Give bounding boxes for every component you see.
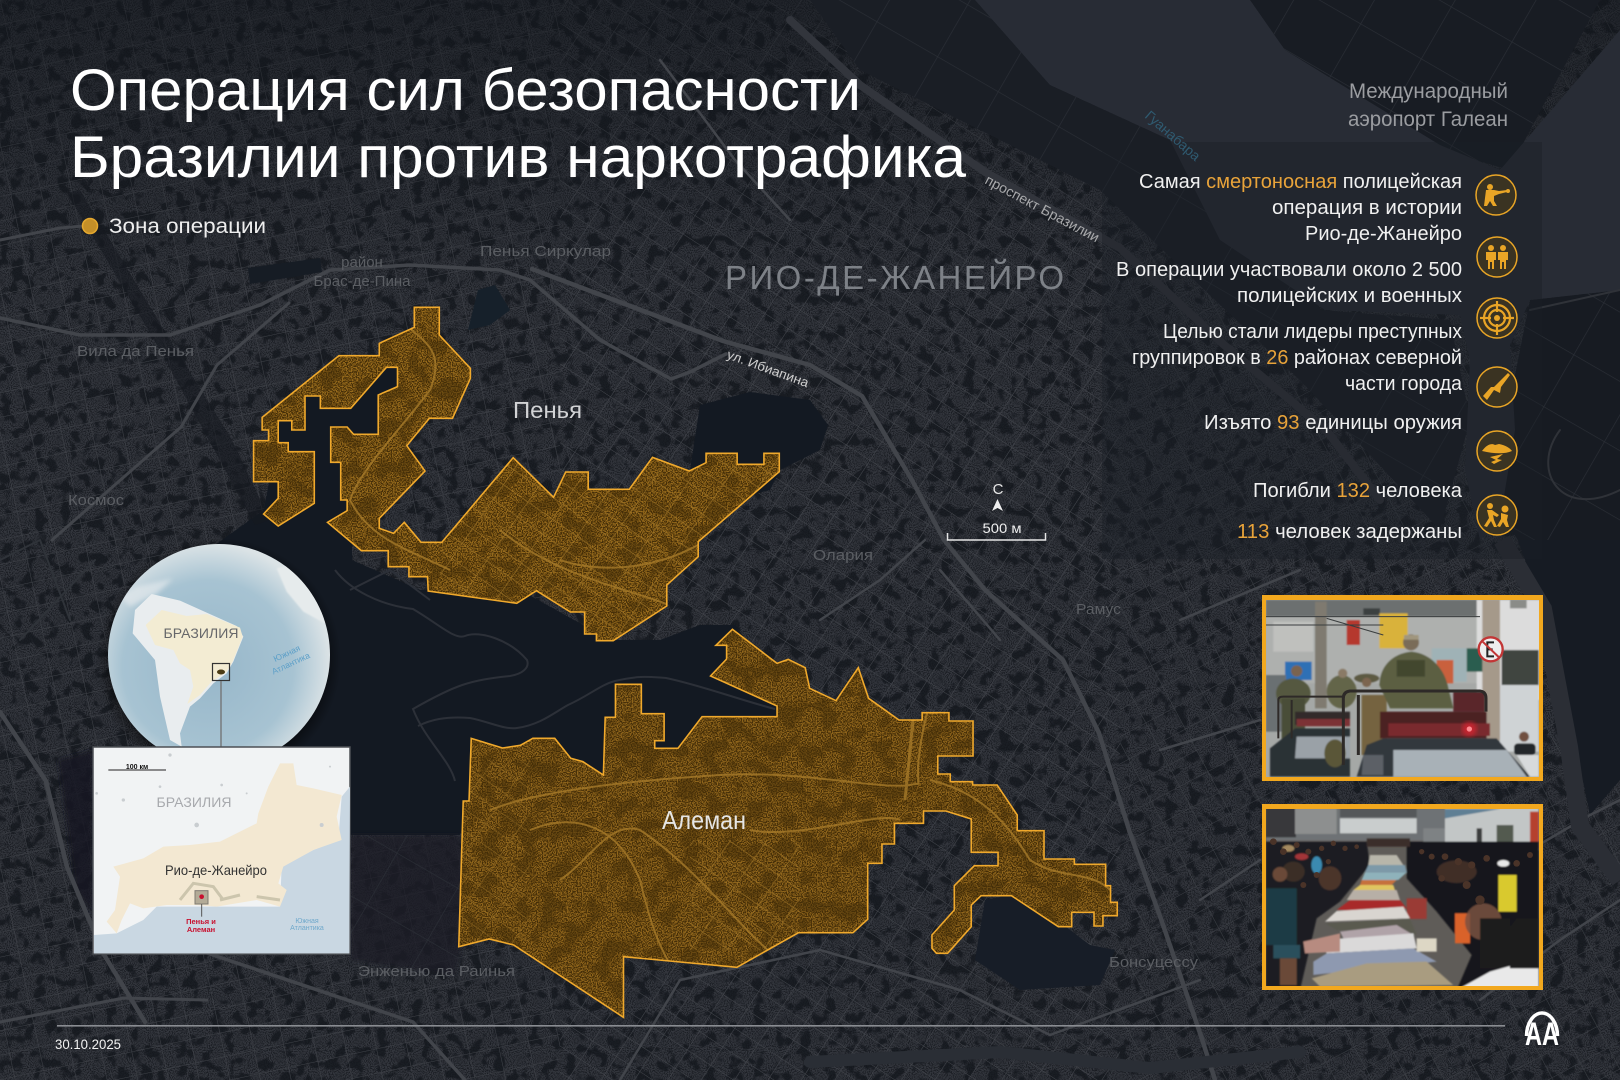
map labels: faint districts: район	[341, 254, 383, 271]
fact: participants	[1116, 259, 1462, 307]
title: Операция сил безопасности	[70, 58, 861, 123]
fact: deadliest operation	[1139, 171, 1462, 245]
zone: Penha	[252, 306, 780, 642]
icon: body on ground	[1477, 431, 1517, 471]
panel: background overlay for facts	[1102, 142, 1542, 559]
inset map: Rio de Janeiro state: Пенья и	[186, 917, 216, 926]
map labels: faint districts: Энженью да Раинья	[358, 963, 515, 980]
map labels: faint districts: Брас-де-Пина	[314, 273, 411, 290]
fact: targets: Целью стали лидеры преступных	[1163, 321, 1462, 343]
icon: arrest	[1477, 495, 1517, 535]
photo: line of bodies in the street	[1262, 804, 1543, 990]
title	[70, 58, 967, 190]
facts text	[1116, 171, 1463, 543]
map labels: faint districts: Бонсуцессу	[1109, 954, 1199, 971]
inset map: Rio de Janeiro state: БРАЗИЛИЯ	[156, 794, 232, 810]
map labels: faint districts	[68, 243, 1199, 980]
zone: Aleman	[450, 620, 1140, 1020]
label: Guanabara: Гуанабара	[1142, 107, 1204, 164]
map labels: faint districts: Пенья Сиркулар	[480, 243, 611, 260]
label: Penha: Пенья	[513, 397, 582, 423]
south america	[133, 594, 243, 747]
inset map: Rio de Janeiro state: Южная	[295, 918, 319, 925]
fact: killed: Погибли 132 человека	[1253, 480, 1463, 502]
bay	[215, 365, 790, 835]
legend: operation zone: Зона операции	[109, 214, 266, 238]
bay islands	[335, 570, 775, 781]
inset map: Rio de Janeiro state: Алеман	[187, 925, 215, 934]
africa	[277, 563, 325, 623]
logo: Anadolu Agency	[1525, 1013, 1559, 1052]
state	[107, 763, 342, 933]
footer rule	[57, 1025, 1505, 1027]
label: airport	[1348, 80, 1508, 131]
sea	[94, 787, 350, 953]
title: Бразилии против наркотрафика	[70, 125, 967, 190]
fact: targets: части города	[1345, 373, 1463, 395]
river band lower right	[1502, 540, 1620, 880]
locator globe: БРАЗИЛИЯ	[164, 625, 238, 641]
fact: deadliest operation: Самая смертоносная полицейская	[1139, 171, 1462, 193]
map labels: faint districts: Космос	[68, 492, 125, 509]
map labels: faint districts: Олария	[813, 547, 873, 564]
label: Rio de Janeiro: РИО-ДЕ-ЖАНЕЙРО	[725, 259, 1064, 296]
scale and north arrow: 500 м	[982, 520, 1022, 536]
fact: deadliest operation: операция в истории	[1272, 197, 1462, 219]
light water	[975, 0, 1620, 540]
port land top right	[810, 0, 1470, 530]
logo: Anadolu Agency: AA	[1525, 1016, 1559, 1052]
date: 30.10.2025	[55, 1036, 121, 1052]
fact: participants: В операции участвовали около 2 500	[1116, 259, 1462, 281]
locator globe: Южная	[272, 643, 302, 664]
inset map: Rio de Janeiro state: Рио-де-Жанейро	[165, 862, 267, 878]
fact: detained: 113 человек задержаны	[1237, 521, 1462, 543]
scale and north arrow	[948, 481, 1046, 540]
map labels: faint districts: Рамус	[1076, 601, 1122, 618]
label: airport: аэропорт Галеан	[1348, 108, 1508, 131]
icon: shooter	[1476, 175, 1516, 215]
fact: targets: группировок в 26 районах северной	[1132, 347, 1462, 369]
fact: weapons: Изъято 93 единицы оружия	[1204, 412, 1462, 434]
inset map: Rio de Janeiro state: 100 км	[126, 764, 148, 771]
locator globe	[101, 542, 332, 746]
fact: deadliest operation: Рио-де-Жанейро	[1305, 223, 1462, 245]
icon: two soldiers	[1477, 237, 1517, 277]
label: Avenida Brasil: проспект Бразилии	[983, 172, 1102, 245]
inset map: Rio de Janeiro state: Атлантика	[290, 925, 324, 932]
map labels: faint districts: Вила да Пенья	[77, 343, 194, 360]
inset map: Rio de Janeiro state	[93, 747, 350, 954]
scale and north arrow: С	[993, 481, 1004, 498]
label: Aleman: Алеман	[662, 805, 746, 835]
fact: participants: полицейских и военных	[1237, 285, 1462, 307]
icon: rifle	[1477, 367, 1517, 407]
locator globe: Атлантика	[270, 650, 312, 676]
label: Ibiapina street: ул. Ибиапина	[725, 347, 812, 391]
label: airport: Международный	[1349, 80, 1508, 103]
icon: target	[1477, 298, 1517, 338]
fact: targets	[1132, 321, 1463, 395]
north america tip	[120, 578, 173, 607]
photo: armed forces on trucks	[1262, 595, 1543, 781]
brazil	[146, 610, 243, 704]
